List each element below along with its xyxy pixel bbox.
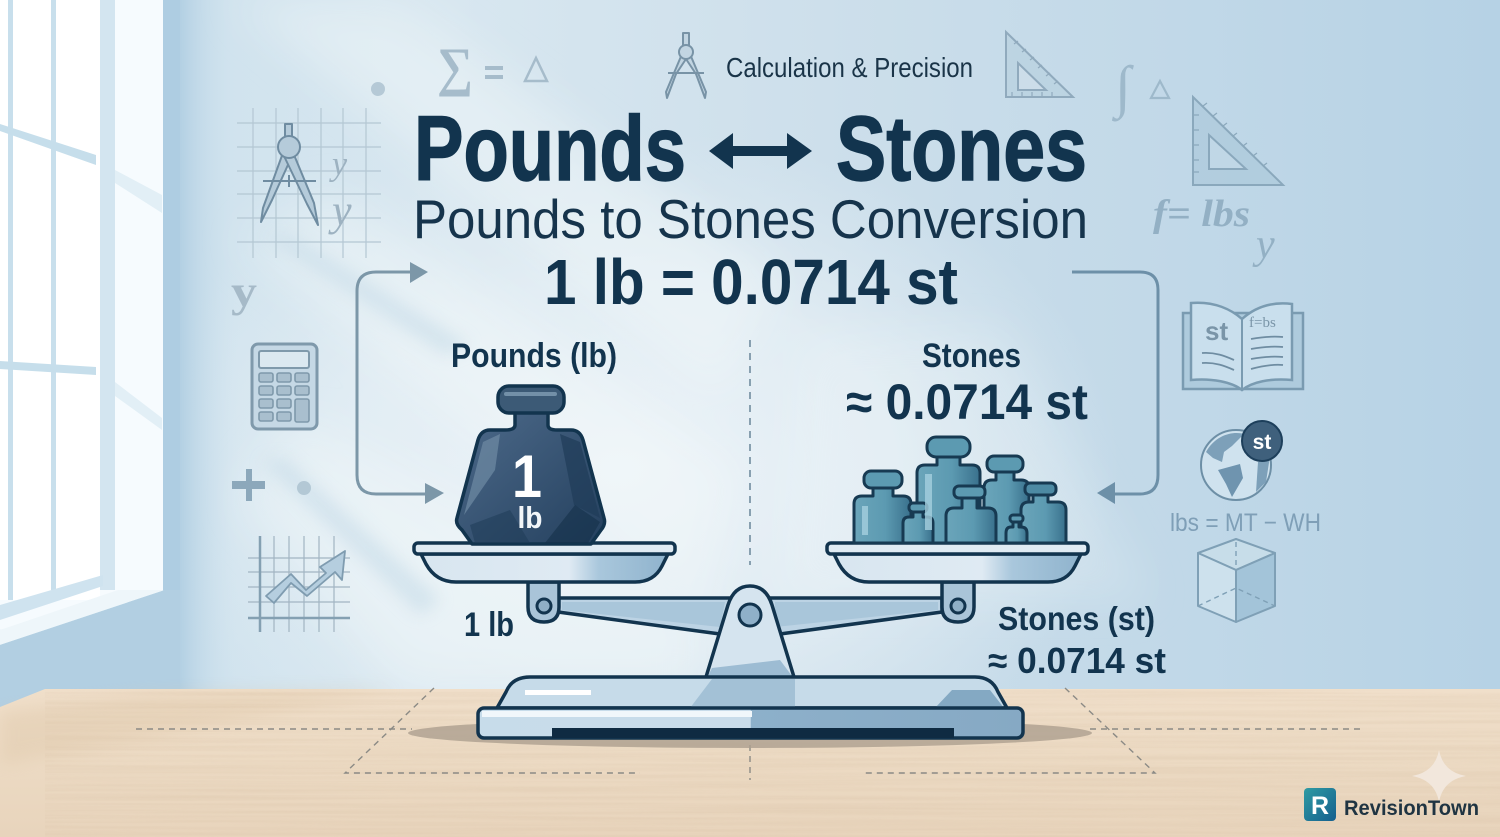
caption: calculation and precision: Calculation & Precision — [726, 52, 973, 83]
balance scale — [414, 543, 1088, 738]
icon: open book — [1183, 303, 1303, 390]
icon: cube — [1198, 539, 1275, 622]
stack of small stone weights — [854, 437, 1066, 543]
logo: RevisionTown: RevisionTown — [1344, 797, 1479, 820]
icon: set square right — [1193, 97, 1283, 185]
table top — [0, 689, 1500, 837]
table shadow band — [0, 689, 400, 765]
central pillar — [706, 586, 794, 677]
dot decoration — [371, 82, 385, 96]
shadow strips on wall — [262, 235, 470, 615]
table guide lines — [136, 688, 1365, 780]
label: 1 lb under pan: 1 lb — [464, 606, 514, 644]
icon: globe with st badge: st — [1253, 431, 1271, 454]
sparkle — [1412, 750, 1466, 802]
label: stones: Stones — [922, 337, 1021, 375]
top math symbols — [437, 37, 547, 97]
label: pounds: Pounds (lb) — [451, 337, 617, 375]
icon: open book: f=bs — [1249, 315, 1276, 331]
math letter y right: y — [1252, 222, 1275, 268]
wall corner shade — [180, 0, 240, 700]
center dashed divider — [749, 340, 751, 565]
icon: set square top — [1006, 32, 1073, 97]
icon: growth chart — [248, 536, 350, 632]
icon: grid with compass: y — [328, 186, 352, 235]
wood grain — [45, 690, 1500, 837]
icon: calculator — [252, 344, 317, 429]
icon: plus — [232, 469, 265, 501]
weight unit: lb — [518, 500, 542, 535]
logo: RevisionTown — [1304, 788, 1479, 821]
icon: open book: st — [1205, 316, 1228, 346]
arrow: left loop — [357, 262, 444, 504]
dot decoration lower — [297, 481, 311, 495]
right bracket — [942, 582, 974, 622]
base — [478, 677, 1023, 738]
sunlight beams on wall — [235, 0, 1150, 690]
icon: compass top — [666, 33, 706, 98]
logo: RevisionTown: R — [1311, 792, 1329, 820]
value: stones st: ≈ 0.0714 st — [988, 640, 1166, 681]
left pan — [414, 543, 675, 582]
wall central glow — [180, 0, 1280, 700]
formula: lbs = MT - WH: lbs = MT − WH — [1170, 509, 1321, 537]
math letter y left: y — [231, 267, 257, 316]
double arrow — [709, 133, 812, 169]
label: stones st: Stones (st) — [998, 600, 1155, 637]
subtitle: Pounds to Stones Conversion — [413, 188, 1088, 250]
icon: globe with st badge — [1201, 421, 1282, 500]
math symbols top right — [1111, 54, 1169, 122]
main title — [414, 98, 1087, 200]
window — [0, 0, 180, 708]
conversion equation: 1 lb = 0.0714 st — [544, 246, 958, 318]
math symbols top right: ∫ — [1111, 54, 1134, 122]
main title: Pounds — [414, 98, 686, 200]
main title: Stones — [836, 98, 1087, 200]
left bracket — [528, 582, 559, 622]
large 1 lb weight — [457, 386, 605, 544]
icon: grid with compass: y — [329, 146, 348, 183]
icon: grid with compass — [237, 108, 381, 258]
arrow: right loop — [1072, 272, 1158, 504]
top math symbols: ∑ — [437, 37, 473, 97]
beam — [558, 598, 942, 634]
formula: f = lbs: f= lbs — [1153, 193, 1250, 235]
scale shadow — [408, 718, 1092, 748]
weight numeral: 1 — [512, 443, 542, 510]
value: stones: ≈ 0.0714 st — [846, 374, 1088, 430]
right pan — [827, 543, 1088, 582]
